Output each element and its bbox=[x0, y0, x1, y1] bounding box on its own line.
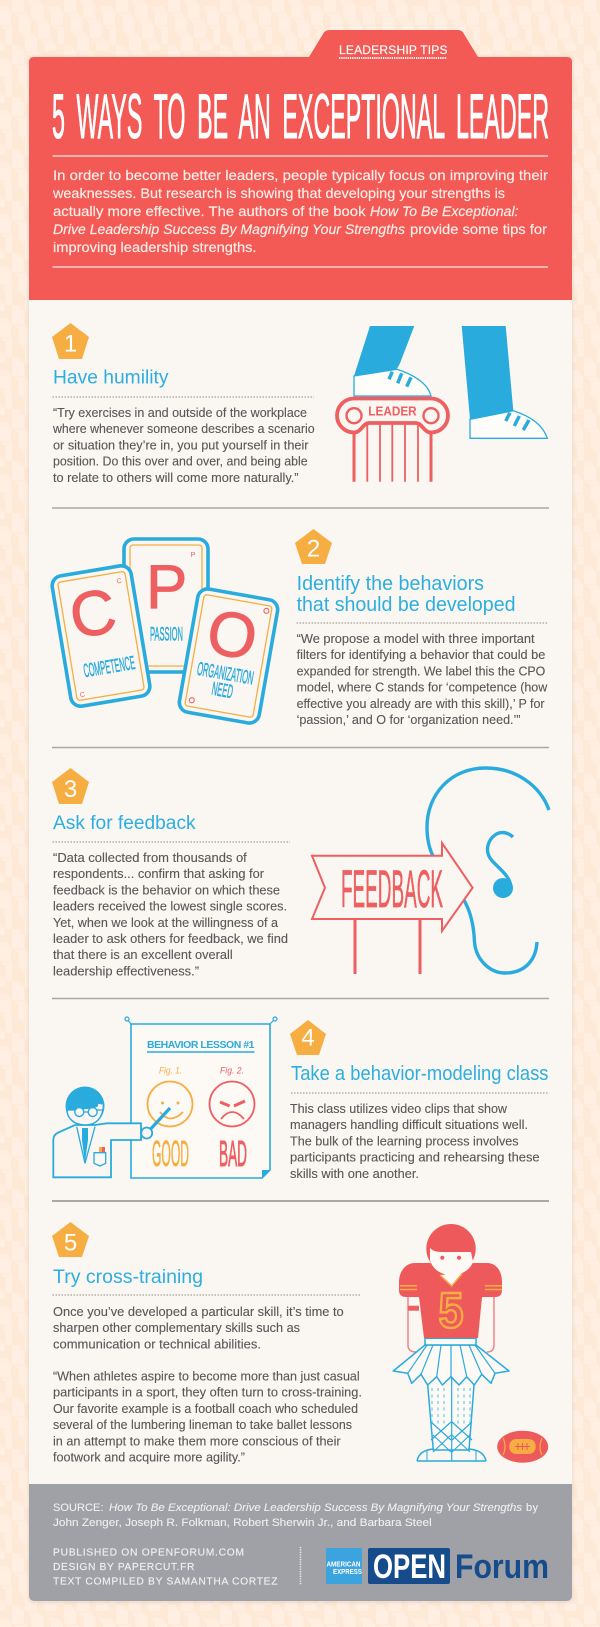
intro text: How To Be Exceptional: bbox=[370, 203, 519, 219]
badge 4 bbox=[290, 1020, 326, 1055]
heading 2: Identify the behaviors bbox=[297, 572, 484, 595]
badge 5: 5 bbox=[64, 1230, 77, 1257]
card C: C bbox=[79, 691, 86, 699]
panel: content background bbox=[29, 290, 572, 1490]
card C: C bbox=[116, 578, 122, 586]
body text 4: The bulk of the learning process involves bbox=[290, 1133, 519, 1148]
right leg and shoe bbox=[462, 326, 547, 438]
body text 1: position. Do this over and over, and being able bbox=[53, 454, 308, 469]
source text: John Zenger, Joseph R. Folkman, Robert Sherwin Jr., and Barbara Steel bbox=[53, 1517, 432, 1529]
card P: P bbox=[146, 553, 187, 622]
body text 5: footwork and acquire more agility.” bbox=[53, 1450, 245, 1464]
section 3: ask for feedback bbox=[52, 768, 549, 978]
source text bbox=[53, 1502, 538, 1529]
heading 2: that should be developed bbox=[297, 593, 516, 616]
body text 3: respondents... confirm that asking for bbox=[53, 866, 265, 881]
card O: NEED bbox=[210, 679, 234, 703]
credits: DESIGN BY PAPERCUT.FR bbox=[53, 1562, 194, 1573]
badge 1: 1 bbox=[64, 330, 77, 358]
body text 4 bbox=[290, 1101, 540, 1181]
jersey bbox=[399, 1263, 502, 1338]
card P: PASSION bbox=[150, 625, 183, 646]
intro text: provide some tips for bbox=[410, 221, 547, 237]
body text 3: feedback is the behavior on which these bbox=[53, 882, 280, 897]
heading 3: Ask for feedback bbox=[53, 813, 196, 834]
body text 2: model, where C stands for ‘competence (how bbox=[297, 680, 548, 695]
illustration: ear and feedback sign bbox=[312, 768, 549, 974]
tutu bbox=[393, 1338, 509, 1385]
jersey: 5 bbox=[438, 1282, 464, 1338]
card P: P bbox=[191, 552, 196, 559]
body text 5: participants in a sport, they often turn to cross-training. bbox=[53, 1385, 362, 1400]
panel: footer bbox=[29, 1484, 572, 1601]
body text 1: where whenever someone describes a scenario bbox=[52, 421, 315, 436]
illustration: teacher and poster bbox=[53, 1017, 277, 1178]
card O bbox=[178, 587, 279, 725]
column bbox=[337, 398, 448, 482]
body text 2: expanded for strength. We label this the CPO bbox=[297, 663, 545, 678]
body text 5: Once you’ve developed a particular skill, it’s time to bbox=[53, 1304, 344, 1319]
badge 4: 4 bbox=[301, 1025, 315, 1052]
section 1: have humility bbox=[52, 323, 547, 485]
illustration: feet stepping on leader column bbox=[337, 326, 547, 482]
card C: C bbox=[65, 576, 121, 652]
column: LEADER bbox=[368, 404, 417, 418]
badge 2 bbox=[295, 529, 332, 564]
body text 5: communication or technical abilities. bbox=[53, 1336, 261, 1351]
body text 5: sharpen other complementary skills such as bbox=[53, 1320, 300, 1335]
heading 1: Have humility bbox=[53, 367, 169, 388]
credits: TEXT COMPILED BY SAMANTHA CORTEZ bbox=[53, 1576, 278, 1588]
source text: by bbox=[526, 1502, 538, 1514]
body text 5 bbox=[53, 1304, 362, 1464]
card O: ORGANIZATION bbox=[195, 659, 255, 690]
logo: american express open forum bbox=[326, 1548, 549, 1586]
body text 2: effective you already are with this skill),’ P for bbox=[297, 696, 545, 711]
body text 3: Yet, when we look at the willingness of a bbox=[53, 915, 279, 930]
bad face: Fig. 2. bbox=[220, 1066, 244, 1076]
card C: COMPETENCE bbox=[82, 653, 137, 682]
tab label: leadership tips: LEADERSHIP TIPS bbox=[339, 43, 448, 57]
body text 1: or situation they’re in, you put yourself in their bbox=[53, 437, 309, 452]
card P bbox=[124, 539, 208, 672]
panel: header bbox=[29, 30, 572, 300]
arms bbox=[408, 1297, 494, 1352]
illustration: CPO cards bbox=[51, 539, 279, 725]
intro text bbox=[52, 167, 548, 255]
body text 2: “We propose a model with three important bbox=[297, 631, 535, 646]
badge 5 bbox=[52, 1222, 89, 1257]
body text 3: that there is an excellent overall bbox=[53, 947, 233, 962]
body text 4: participants practicing and rehearsing these bbox=[290, 1150, 540, 1165]
legs bbox=[417, 1377, 486, 1461]
credits: PUBLISHED ON OPENFORUM.COM bbox=[53, 1548, 244, 1559]
body text 3: “Data collected from thousands of bbox=[53, 850, 247, 865]
logo: american express open forum: Forum bbox=[455, 1548, 549, 1586]
teacher bbox=[53, 1086, 170, 1177]
body text 3: leaders received the lowest single scores. bbox=[53, 899, 287, 914]
illustration: teacher and poster: BAD bbox=[219, 1133, 247, 1174]
card O: O bbox=[202, 597, 262, 674]
body text 1: “Try exercises in and outside of the workplace bbox=[53, 405, 307, 420]
source text: SOURCE: bbox=[53, 1502, 104, 1514]
credits bbox=[53, 1548, 278, 1588]
body text 4: This class utilizes video clips that show bbox=[290, 1101, 508, 1116]
heading 2 bbox=[297, 572, 516, 616]
body text 2: ‘passion,’ and O for ‘organization need.’” bbox=[297, 712, 520, 727]
body text 2: filters for identifying a behavior that could be bbox=[297, 647, 545, 662]
poster bbox=[125, 1017, 277, 1178]
left leg and shoe bbox=[354, 326, 431, 396]
body text 4: managers handling difficult situations well. bbox=[290, 1117, 528, 1132]
body text 5: Our favorite example is a football coach who scheduled bbox=[53, 1401, 358, 1416]
heading 5: Try cross-training bbox=[53, 1267, 203, 1288]
body text 3: leader to ask others for feedback, we find bbox=[53, 931, 288, 946]
football bbox=[497, 1431, 548, 1463]
logo: american express open forum: AMERICAN bbox=[326, 1562, 360, 1568]
body text 4: skills with one another. bbox=[290, 1166, 419, 1181]
feedback arrow sign bbox=[312, 843, 473, 931]
body text 1 bbox=[52, 405, 315, 485]
body text 5: “When athletes aspire to become more than just casual bbox=[53, 1368, 360, 1384]
section 2: identify the behaviors bbox=[51, 529, 548, 727]
poster: BEHAVIOR LESSON #1 bbox=[147, 1039, 255, 1051]
section 4: behavior-modeling class bbox=[53, 1017, 549, 1181]
illustration: football player in tutu bbox=[393, 1224, 509, 1461]
badge 3: 3 bbox=[64, 776, 77, 803]
section 5: cross-training bbox=[52, 1222, 548, 1464]
intro text: weaknesses. But research is showing that developing your strengths is bbox=[52, 185, 505, 201]
badge 3 bbox=[52, 768, 89, 804]
bad face bbox=[210, 1066, 254, 1174]
heading 4: Take a behavior-modeling class bbox=[291, 1063, 548, 1085]
intro text: improving leadership strengths. bbox=[53, 239, 256, 255]
body text 5: in an attempt to make them more conscious of their bbox=[53, 1433, 341, 1448]
intro text: In order to become better leaders, people typically focus on improving their bbox=[53, 167, 548, 183]
body text 3: leadership effectiveness.” bbox=[53, 963, 199, 978]
intro text: actually more effective. The authors of the book bbox=[53, 203, 367, 219]
good face bbox=[148, 1066, 192, 1174]
body text 3 bbox=[53, 850, 288, 978]
badge 2: 2 bbox=[307, 536, 320, 563]
head and helmet bbox=[426, 1224, 476, 1286]
intro text: Drive Leadership Success By Magnifying Your Strengths bbox=[53, 221, 405, 237]
logo: american express open forum: OPEN bbox=[373, 1548, 446, 1586]
card C bbox=[51, 564, 151, 708]
logo: american express open forum: EXPRESS bbox=[333, 1569, 362, 1576]
body text 1: to relate to others will come more naturally.” bbox=[53, 470, 298, 485]
good face: Fig. 1. bbox=[159, 1066, 182, 1076]
badge 1 bbox=[52, 323, 89, 359]
illustration: teacher and poster: GOOD bbox=[152, 1133, 189, 1174]
body text 5: several of the lumbering lineman to take ballet lessons bbox=[53, 1417, 352, 1432]
ear bbox=[427, 768, 549, 973]
sign posts bbox=[355, 919, 420, 974]
source text: How To Be Exceptional: Drive Leadership Success By Magnifying Your Strengths bbox=[109, 1502, 523, 1514]
body text 2 bbox=[297, 631, 548, 727]
